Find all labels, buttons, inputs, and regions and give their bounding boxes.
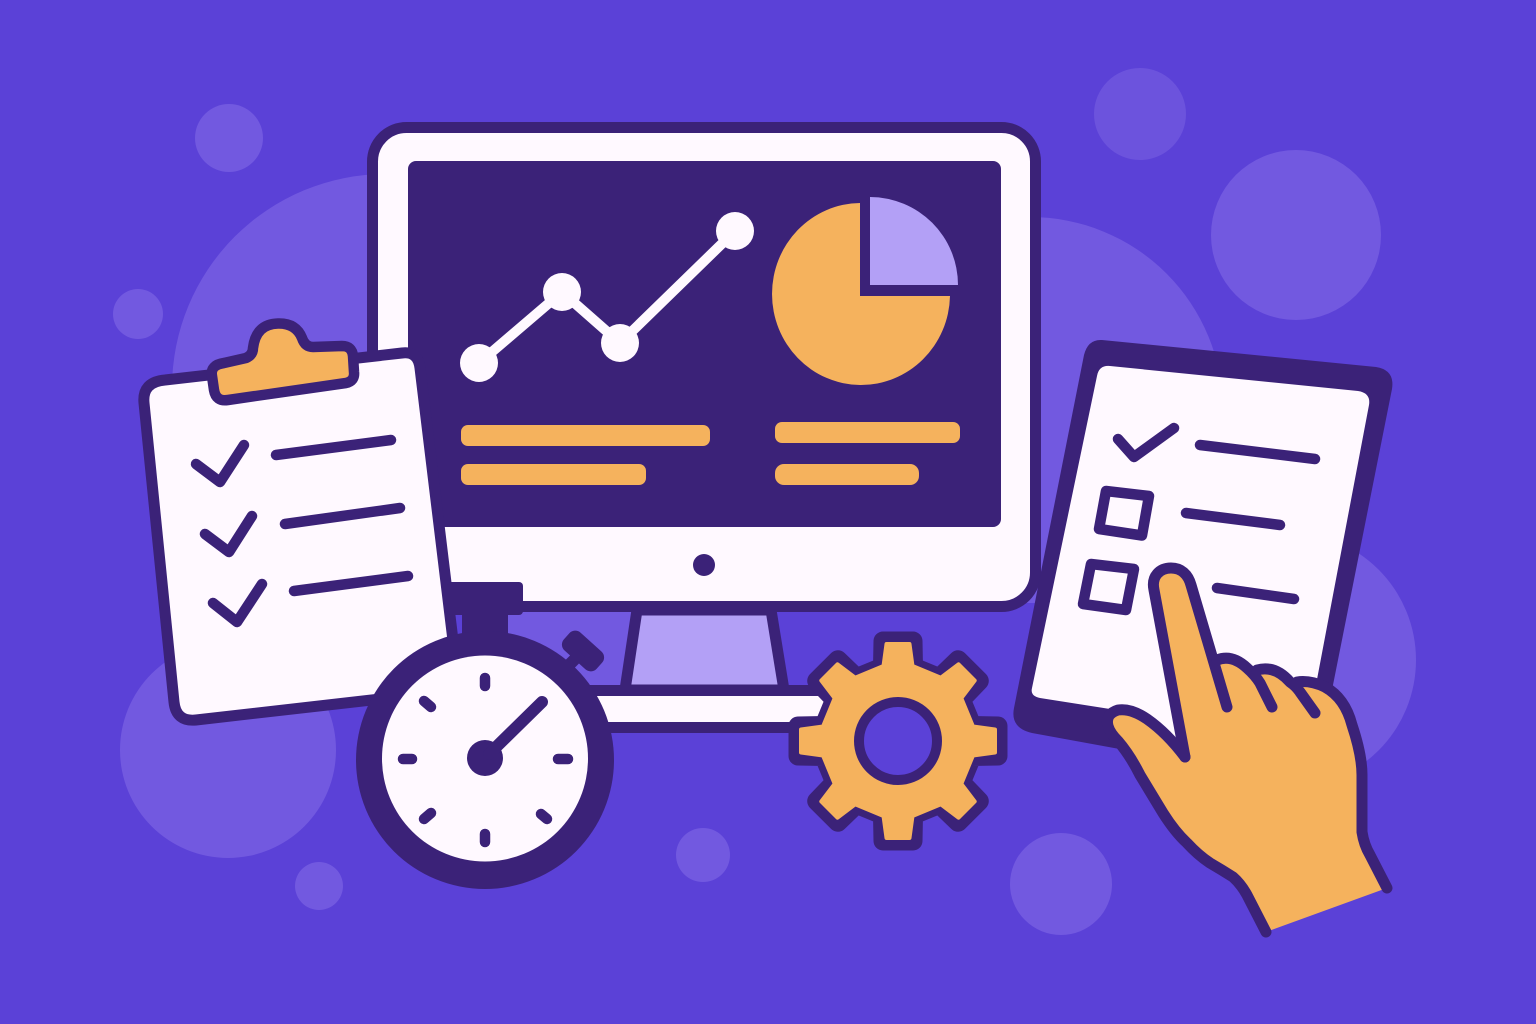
tablet checklist (1083, 428, 1315, 610)
line chart (460, 212, 754, 382)
stopwatch hand (467, 702, 542, 776)
clipboard checklist (196, 440, 408, 622)
tablet screen (1032, 366, 1369, 760)
monitor power dot (693, 554, 715, 576)
stopwatch body (356, 631, 614, 889)
pie chart (772, 197, 958, 385)
hand (1107, 568, 1387, 932)
tablet (1013, 340, 1392, 760)
gear face (801, 644, 995, 838)
background circles (113, 68, 1416, 935)
monitor stand (560, 610, 840, 728)
hand finger lines (1217, 658, 1387, 888)
stopwatch (356, 582, 614, 889)
clipboard (144, 323, 459, 720)
monitor (372, 128, 1036, 606)
gear (798, 641, 998, 841)
stopwatch crown (447, 582, 523, 615)
stopwatch side button (559, 627, 607, 675)
gear hole (859, 702, 937, 780)
monitor screen (408, 161, 1001, 527)
stopwatch ticks (403, 678, 568, 842)
clipboard clip (212, 323, 354, 400)
orange text bars (461, 422, 960, 485)
